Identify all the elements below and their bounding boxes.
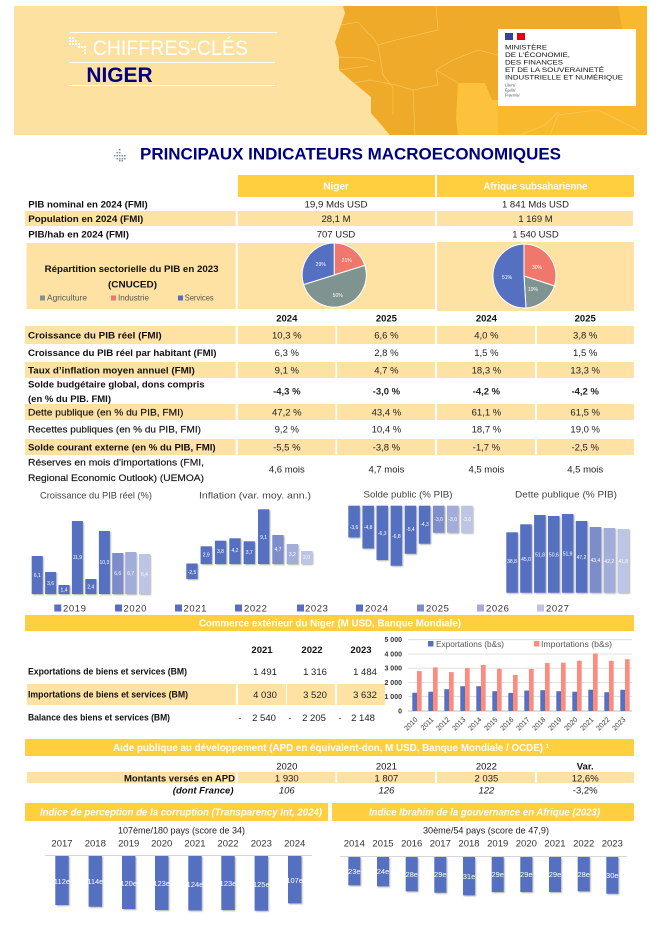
panel: gouvernance: 29e (520, 870, 533, 879)
panel: gouvernance: 2020 (516, 838, 537, 850)
pie: Afrique subsaharienne (493, 244, 556, 308)
legend: years: 2023 (305, 604, 329, 614)
bar chart: solde public: -4,3 (420, 522, 429, 528)
table: macro indicators: Solde budgétaire global, dons compris (28, 380, 205, 390)
table: aide publique: Montants versés en APD (124, 774, 235, 784)
section title: PRINCIPAUX INDICATEURS MACROECONOMIQUES (140, 145, 561, 163)
heading: aide publique: Aide publique au développement (APD en équivalent-don, M USD, Banque Mondiale / OCDE) ¹ (113, 743, 550, 754)
panel: corruption: 2024 (284, 838, 305, 850)
table: macro indicators: -3,0 % (373, 386, 401, 398)
panel: sector breakdown: Répartition sectorielle du PIB en 2023 (45, 264, 219, 275)
panel: corruption: 2022 (217, 838, 239, 850)
table: macro indicators: 4,5 mois (468, 464, 505, 476)
panel: corruption: 2023 (251, 838, 272, 850)
table: key indicators: Afrique subsaharienne (484, 182, 588, 192)
table: key indicators: PIB/hab en 2024 (FMI) (28, 230, 129, 240)
legend: sectors (40, 294, 214, 302)
bar chart: dette publique: Dette publique (% PIB) (515, 490, 617, 500)
pie: Afrique subsaharienne: 51% (502, 275, 513, 281)
panel: gouvernance: 2018 (458, 838, 480, 850)
bar chart: exportations et importations: 2021 (579, 716, 595, 732)
bar chart: exportations et importations: 2011 (420, 716, 435, 732)
table: macro indicators: -2,5 % (571, 442, 599, 454)
icon: dots (69, 37, 86, 54)
legend: years: 2024 (365, 604, 389, 614)
logo: ministère: Liberté (504, 84, 516, 88)
panel: corruption: 107ème/180 pays (score de 34) (118, 826, 245, 836)
panel: gouvernance: 29e (434, 870, 447, 879)
table: macro indicators: -1,7 % (473, 442, 501, 454)
table: aide publique: 1 807 (375, 774, 398, 784)
table: macro indicators: 4,5 mois (567, 464, 603, 476)
table: commerce: 2 540 (252, 713, 276, 724)
table: key indicators: Population en 2024 (FMI) (28, 214, 143, 225)
bar chart: inflation: 4,2 (232, 548, 239, 554)
panel: corruption: 2018 (85, 838, 106, 850)
bar chart: dette publique: 51,8 (535, 552, 545, 558)
bar chart: croissance du PIB réel: 6,1 (34, 573, 41, 579)
bar chart: exportations et importations (384, 637, 632, 732)
bar chart: exportations et importations: 2013 (451, 716, 467, 732)
table: macro indicators: Croissance du PIB réel (FMI) (28, 330, 162, 342)
table: key indicators: 1 169 M (518, 214, 553, 225)
pie: Niger: 29% (316, 262, 326, 268)
panel: corruption: Indice de perception de la corruption (Transparency Int, 2024) (40, 808, 323, 818)
panel: gouvernance: 2021 (544, 838, 566, 850)
table: commerce: Balance des biens et services (BM) (28, 712, 170, 724)
bar chart: inflation: 9,1 (260, 535, 267, 541)
pie: Niger (302, 243, 366, 307)
table: key indicators: PIB nominal en 2024 (FMI) (28, 200, 148, 210)
legend: years: 2027 (546, 604, 570, 614)
table: macro indicators: 6,3 % (275, 348, 299, 359)
panel: sector breakdown: (CNUCED) (108, 280, 157, 290)
table: aide publique: 12,6% (572, 774, 599, 784)
table: macro indicators: -4,2 % (571, 386, 599, 398)
panel: gouvernance: 2023 (602, 838, 623, 850)
table: commerce: 1 491 (253, 667, 277, 678)
panel: corruption: 120e (120, 879, 137, 888)
panel: corruption: 2020 (151, 838, 172, 850)
bar chart: croissance du PIB réel: 6,4 (141, 572, 148, 578)
table: macro indicators: 47,2 % (272, 408, 302, 418)
table: macro indicators: Taux d’inflation moyen annuel (FMI) (28, 366, 195, 376)
bar chart: dette publique: 43,4 (591, 558, 600, 564)
table: macro indicators (25, 314, 634, 484)
bar chart: exportations et importations: 2016 (499, 716, 515, 732)
bar chart: croissance du PIB réel: 1,4 (61, 588, 68, 594)
table: key indicators: 19,9 Mds USD (304, 200, 368, 210)
table: macro indicators: -4,3 % (273, 386, 301, 398)
bar chart: exportations et importations: 3 000 (384, 666, 402, 672)
table: commerce: 2 148 (351, 713, 375, 724)
panel: gouvernance: 2014 (344, 838, 365, 850)
panel: gouvernance: 2019 (487, 838, 508, 850)
table: macro indicators: 18,3 % (472, 366, 502, 376)
bar chart: solde public: -3,0 (448, 517, 457, 523)
table: macro indicators: Réserves en mois d'importations (FMI, (28, 458, 204, 468)
bar chart: croissance du PIB réel: 11,9 (73, 555, 82, 561)
bar chart: croissance du PIB réel: 10,3 (100, 560, 109, 566)
logo: ministère: DES FINANCES (505, 60, 564, 66)
table: aide publique: 2020 (276, 762, 297, 772)
table: key indicators: 707 USD (317, 230, 355, 240)
bar chart: inflation: 2,9 (203, 552, 210, 558)
panel: gouvernance: 2016 (401, 838, 422, 850)
bar chart: exportations et importations: 2017 (515, 716, 531, 732)
bar chart: inflation: 3,8 (217, 549, 224, 555)
legend: flux (428, 640, 612, 649)
bar chart: exportations et importations: 1 000 (384, 694, 402, 701)
table: macro indicators: 9,2 % (275, 424, 299, 436)
panel: corruption: 123e (220, 879, 236, 888)
table: commerce: 2021 (251, 645, 273, 656)
panel: corruption: 125e (253, 880, 270, 889)
bar chart: exportations et importations: 2023 (611, 716, 627, 732)
table: commerce: Exportations de biens et services (BM) (28, 666, 187, 678)
table: macro indicators: 4,7 mois (368, 464, 405, 476)
heading: commerce extérieur: Commerce extérieur du Niger (M USD, Banque Mondiale) (199, 618, 461, 630)
table: macro indicators: 13,3 % (570, 366, 601, 376)
bar chart: solde public (348, 490, 473, 566)
table: macro indicators: 19,0 % (570, 424, 601, 436)
panel: sector breakdown (26, 242, 634, 311)
panel: corruption: 107e (286, 876, 303, 885)
bar chart: exportations et importations: 2020 (563, 716, 579, 732)
table: macro indicators: 61,5 % (570, 408, 601, 418)
bar chart: exportations et importations: 2 000 (384, 680, 402, 687)
legend: flux: Exportations (b&s) (436, 640, 504, 649)
table: aide publique: 1 930 (275, 774, 299, 784)
bar chart: solde public: -3,0 (434, 517, 443, 523)
bar chart: exportations et importations: 2012 (435, 716, 451, 732)
bar chart: dette publique: 50,6 (549, 552, 559, 558)
bar chart: exportations et importations: 4 000 (384, 651, 402, 658)
bar chart: solde public: -3,6 (350, 525, 359, 531)
bar chart: dette publique: 47,2 (577, 555, 587, 561)
table: macro indicators: 2025 (575, 314, 596, 324)
banner rules (70, 32, 277, 86)
logo: ministère (498, 29, 636, 106)
bar chart: exportations et importations: 2022 (595, 716, 611, 732)
table: commerce: 3 520 (303, 690, 327, 701)
bar chart: exportations et importations: 5 000 (384, 637, 402, 644)
table: macro indicators: 2,8 % (374, 348, 399, 359)
bar chart: solde public: -3,0 (462, 517, 471, 523)
table: aide publique (27, 762, 634, 796)
bar chart: solde public: -6,8 (392, 534, 401, 540)
table: macro indicators: 6,6 % (374, 330, 399, 342)
table: aide publique: 2 035 (475, 774, 498, 784)
heading: aide publique (25, 739, 634, 756)
table: macro indicators: 61,1 % (472, 408, 502, 418)
bar chart: dette publique: 42,2 (604, 559, 614, 565)
bar chart: inflation: 2,0 (303, 555, 310, 561)
bar chart: dette publique (506, 490, 629, 593)
table: macro indicators: Regional Economic Outlook) (UEMOA) (28, 473, 204, 484)
table: commerce: 2023 (350, 645, 372, 656)
pie: Niger: 50% (333, 293, 343, 299)
table: macro indicators: -5,5 % (273, 442, 301, 454)
legend: years: 2026 (486, 604, 510, 614)
table: macro indicators: 4,0 % (474, 330, 499, 342)
panel: corruption (25, 803, 328, 911)
table: macro indicators: 43,4 % (372, 408, 402, 418)
legend: years (54, 604, 570, 614)
table: commerce: 2 205 (302, 713, 326, 724)
pie: Afrique subsaharienne: 19% (528, 287, 539, 293)
bar chart: dette publique: 38,8 (507, 559, 517, 565)
bar chart: exportations et importations: 2010 (403, 716, 419, 732)
panel: gouvernance: 23e (348, 867, 361, 876)
table: macro indicators: -4,2 % (473, 386, 501, 398)
panel: corruption: 123e (153, 879, 170, 888)
bar chart: dette publique: 45,0 (521, 557, 531, 563)
bar chart: croissance du PIB réel (32, 490, 152, 594)
map of West Africa (335, 6, 647, 135)
panel: gouvernance (332, 803, 634, 895)
table: macro indicators: Solde courant externe (en % du PIB, FMI) (28, 442, 216, 454)
table: macro indicators: -3,8 % (373, 442, 401, 454)
table: macro indicators: 2024 (276, 314, 298, 324)
pie: Niger: 21% (342, 258, 352, 264)
table: aide publique: Var. (577, 762, 594, 772)
table: commerce: 2022 (301, 645, 323, 656)
bar chart: croissance du PIB réel: 6,6 (114, 571, 121, 577)
bar chart: inflation (186, 490, 312, 579)
panel: corruption: 2017 (51, 838, 73, 850)
bar chart: inflation: Inflation (var. moy. ann.) (199, 490, 311, 502)
panel: gouvernance: 24e (377, 867, 389, 876)
panel: corruption: 2019 (118, 838, 139, 850)
panel: corruption: 114e (87, 877, 103, 886)
legend: flux: Importations (b&s) (541, 640, 612, 649)
logo: ministère: Fraternité (504, 94, 520, 98)
country name: NIGER (86, 64, 153, 87)
bar chart: croissance du PIB réel: 3,6 (47, 581, 54, 587)
legend: sectors: Services (185, 294, 214, 302)
table: macro indicators: Croissance du PIB réel par habitant (FMI) (28, 348, 216, 359)
panel: gouvernance: 2015 (372, 838, 394, 850)
table: aide publique: 122 (478, 786, 495, 796)
bar chart: inflation: -2,5 (188, 570, 197, 576)
table: key indicators: 1 540 USD (512, 230, 559, 240)
table: commerce: Importations de biens et services (BM) (28, 690, 188, 700)
table: commerce: - (288, 713, 292, 724)
table: aide publique: 106 (279, 786, 295, 796)
table: aide publique: 126 (378, 786, 395, 796)
logo: ministère: ET DE LA SOUVERAINETÉ (505, 65, 605, 74)
table: macro indicators: 10,3 % (272, 330, 302, 342)
panel: corruption: 112e (54, 877, 70, 886)
panel: gouvernance: 29e (549, 870, 561, 879)
bar chart: solde public: -6,3 (378, 531, 387, 537)
bar chart: croissance du PIB réel: 2,4 (87, 584, 94, 590)
panel: gouvernance: 28e (577, 870, 590, 879)
bar chart: solde public: Solde public (% PIB) (364, 490, 452, 500)
panel: gouvernance: 30e (606, 871, 619, 880)
bar chart: exportations et importations: 0 (398, 708, 402, 715)
panel: gouvernance: 31e (463, 872, 475, 881)
bar chart: exportations et importations: 2018 (531, 716, 547, 732)
bar chart: inflation: 3,7 (246, 550, 253, 556)
logo: ministère: Égalité (504, 88, 516, 92)
legend: years: 2020 (124, 604, 147, 614)
table: macro indicators: 18,7 % (472, 424, 502, 436)
bar chart: inflation: 4,7 (275, 547, 282, 553)
panel: gouvernance: 2022 (573, 838, 594, 850)
bar chart: dette publique: 51,9 (563, 552, 573, 558)
bar chart: solde public: -4,8 (364, 525, 373, 531)
table: macro indicators: 1,5 % (573, 348, 598, 359)
bar chart: exportations et importations: 2019 (547, 716, 563, 732)
table: commerce: - (338, 713, 342, 724)
bar chart: croissance du PIB réel: Croissance du PIB réel (%) (40, 490, 152, 502)
legend: years: 2019 (63, 604, 87, 614)
bar chart: solde public: -5,4 (406, 527, 415, 533)
panel: gouvernance: Indice Ibrahim de la gouvernance en Afrique (2023) (369, 808, 601, 818)
table: key indicators (25, 175, 634, 240)
logo: ministère: MINISTÈRE (505, 42, 548, 52)
banner title: CHIFFRES-CLÉS (93, 37, 248, 60)
heading: commerce extérieur (25, 615, 634, 631)
logo: ministère: INDUSTRIELLE ET NUMÉRIQUE (505, 72, 624, 82)
table: key indicators: 28,1 M (321, 214, 351, 225)
table: commerce: 1 484 (353, 667, 377, 678)
panel: corruption: 2021 (184, 838, 206, 850)
panel: gouvernance: 2017 (430, 838, 451, 850)
banner (14, 6, 647, 135)
table: key indicators: Niger (323, 182, 349, 192)
table: key indicators: 1 841 Mds USD (502, 200, 569, 210)
pie: Afrique subsaharienne: 30% (532, 265, 543, 271)
panel: corruption: 124e (187, 880, 203, 889)
table: macro indicators: 2024 (476, 314, 498, 324)
legend: sectors: Industrie (118, 294, 150, 302)
table: aide publique: 2022 (476, 762, 497, 772)
table: macro indicators: 4,6 mois (269, 464, 305, 476)
table: commerce (27, 645, 385, 724)
table: aide publique: (dont France) (173, 786, 234, 796)
panel: gouvernance: 28e (405, 870, 418, 879)
legend: years: 2025 (426, 604, 450, 614)
panel: gouvernance: 30ème/54 pays (score de 47,9) (423, 826, 549, 836)
table: aide publique: -3,2% (573, 786, 598, 796)
table: macro indicators: Recettes publiques (en % du PIB, FMI) (28, 424, 201, 436)
logo: ministère: DE L'ÉCONOMIE, (505, 50, 570, 59)
table: macro indicators: (en % du PIB. FMI) (28, 394, 111, 405)
table: commerce: 1 316 (303, 667, 327, 678)
table: commerce: 4 030 (253, 690, 277, 701)
table: macro indicators: 4,7 % (374, 366, 399, 376)
panel: gouvernance: 29e (491, 870, 504, 879)
table: macro indicators: 1,5 % (474, 348, 499, 359)
bar chart: exportations et importations: 2014 (467, 716, 483, 732)
bar chart: exportations et importations: 2015 (483, 716, 499, 732)
table: macro indicators: 2025 (376, 314, 398, 324)
table: commerce: - (238, 713, 242, 724)
table: macro indicators: 10,4 % (372, 424, 402, 436)
legend: sectors: Agriculture (47, 294, 88, 302)
legend: years: 2021 (184, 604, 207, 614)
bar chart: dette publique: 41,8 (618, 559, 628, 565)
table: commerce: 3 632 (353, 690, 377, 701)
bar chart: inflation: 3,2 (289, 552, 296, 558)
table: macro indicators: Dette publique (en % du PIB, FMI) (28, 408, 183, 418)
bar chart: croissance du PIB réel: 6,7 (127, 571, 134, 577)
table: macro indicators: 3,8 % (573, 330, 598, 342)
legend: years: 2022 (244, 604, 268, 614)
table: macro indicators: 9,1 % (275, 366, 299, 376)
table: aide publique: 2021 (376, 762, 397, 772)
